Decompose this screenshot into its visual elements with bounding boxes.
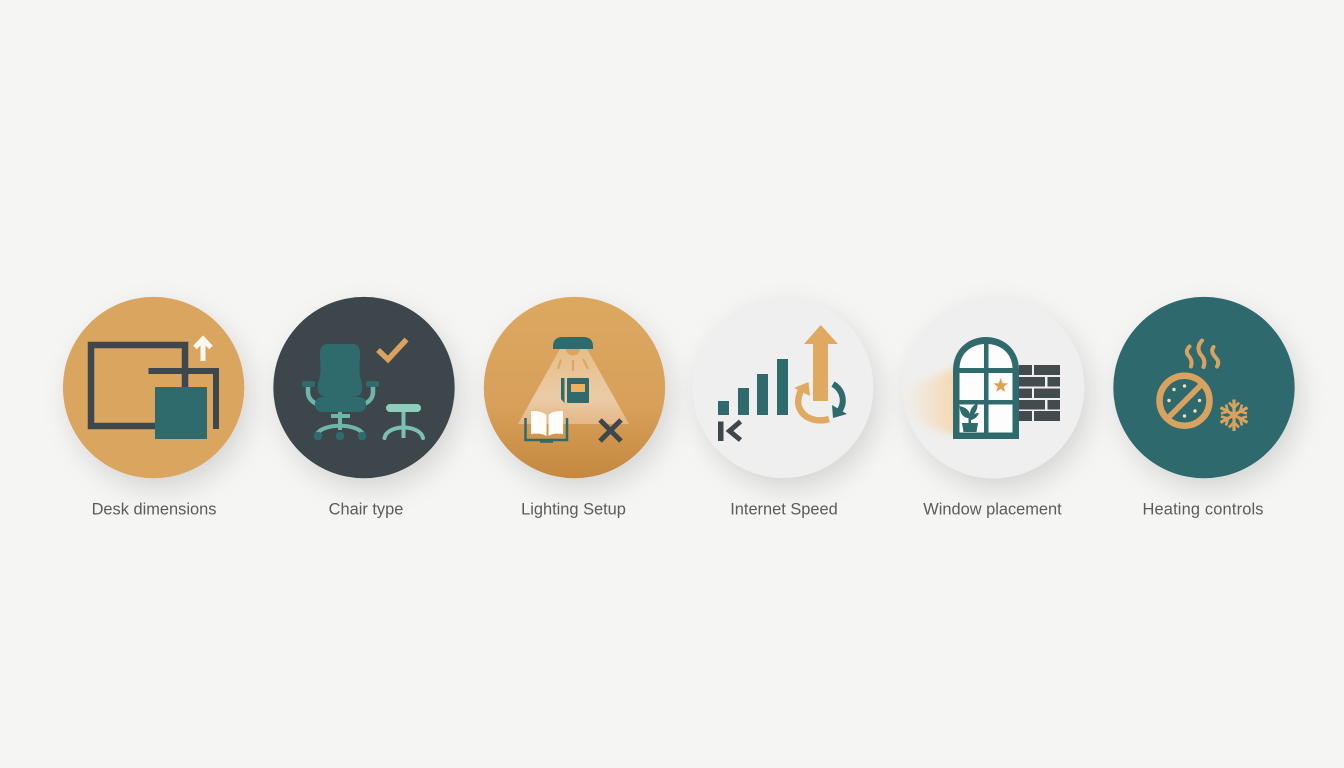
icon: teal cycle arrow — [832, 384, 847, 418]
circle: chair background — [273, 297, 455, 478]
icon: stool — [384, 404, 423, 438]
icon: brick wall — [1019, 365, 1060, 421]
panel: lighting setup — [484, 297, 665, 518]
icon: orange cycle arrow — [794, 382, 829, 420]
icon: snowflake — [1220, 400, 1248, 431]
label: internet speed: Internet Speed — [730, 500, 838, 518]
panel: desk dimensions — [63, 297, 244, 518]
panel: window placement — [900, 297, 1084, 518]
label: desk dimensions: Desk dimensions — [92, 500, 216, 518]
circle: internet background — [693, 297, 873, 478]
icon: check mark — [378, 340, 406, 360]
icon: teal square — [155, 387, 207, 439]
icon: cross — [600, 420, 621, 441]
icon: white up arrow — [195, 339, 211, 361]
icon: sunlight glow — [910, 364, 953, 438]
label: window placement: Window placement — [923, 500, 1062, 518]
icon: heat waves — [1187, 340, 1218, 367]
icon: light beam — [518, 349, 629, 424]
icon: star — [993, 378, 1008, 392]
circle: window background — [903, 297, 1084, 478]
icon: desk outlines — [91, 345, 216, 429]
label: chair type: Chair type — [329, 500, 403, 518]
icon: arched window — [953, 337, 1019, 439]
circle: heating background — [1113, 297, 1295, 478]
icon: up arrow — [804, 325, 838, 401]
panel: chair type — [273, 297, 455, 518]
icon: office chair — [302, 344, 379, 440]
icon: signal bars — [718, 359, 788, 415]
icon: ceiling lamp — [553, 337, 593, 371]
icon: prohibited dial — [1160, 376, 1210, 426]
label: lighting setup: Lighting Setup — [521, 500, 626, 518]
icon: closed book — [561, 378, 589, 403]
panel: internet speed — [693, 297, 873, 518]
panel: heating controls — [1113, 297, 1295, 518]
circle: desk background — [63, 297, 244, 478]
icon: K mark — [718, 422, 740, 441]
label: heating controls: Heating controls — [1142, 500, 1264, 518]
icon: open book — [526, 411, 567, 442]
icon: plant — [960, 404, 979, 432]
circle: lighting background — [484, 297, 665, 478]
